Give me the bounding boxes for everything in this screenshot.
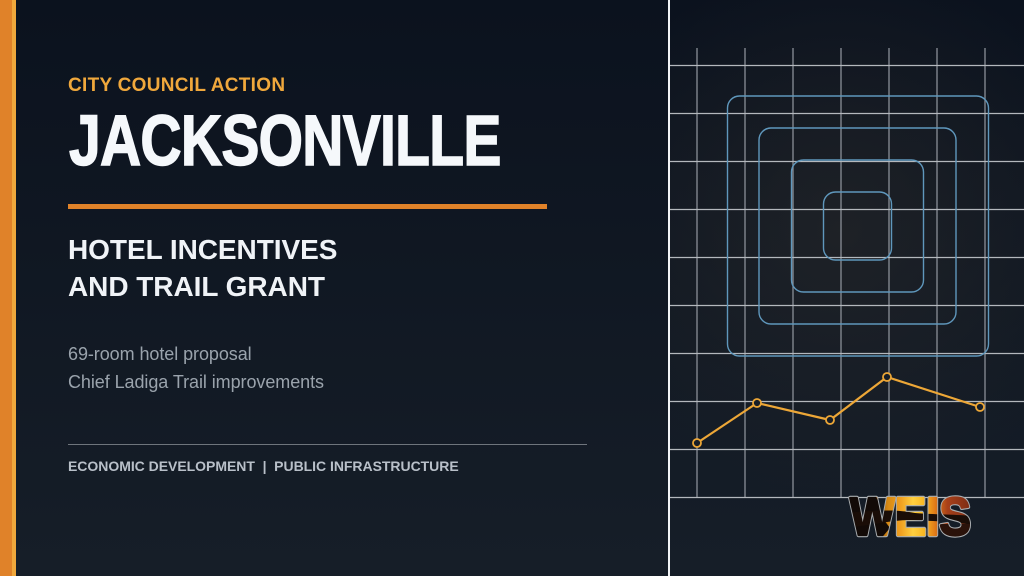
footer rule — [68, 444, 587, 445]
title: Jacksonville: JACKSONVILLE — [69, 102, 501, 181]
orange divider — [68, 204, 547, 209]
panel: left accent stripe — [0, 0, 16, 576]
text block: project details — [68, 344, 324, 392]
line chart — [693, 373, 984, 447]
kicker: city council action: CITY COUNCIL ACTION — [68, 75, 285, 96]
logo: WEIS: WEIS — [850, 487, 971, 547]
footer tags: ECONOMIC DEVELOPMENT | PUBLIC INFRASTRUCTURE — [68, 458, 459, 474]
subtitle: hotel incentives and trail grant — [68, 234, 337, 302]
grid lines — [670, 48, 1024, 498]
subtitle: hotel incentives and trail grant: AND TRAIL GRANT — [68, 271, 325, 302]
concentric rounded squares — [728, 96, 988, 356]
text block: project details: Chief Ladiga Trail improvements — [68, 372, 324, 392]
logo: WEIS: WEIS — [850, 487, 971, 547]
vertical panel divider — [668, 0, 670, 576]
subtitle: hotel incentives and trail grant: HOTEL INCENTIVES — [68, 234, 337, 265]
text block: project details: 69-room hotel proposal — [68, 344, 252, 364]
